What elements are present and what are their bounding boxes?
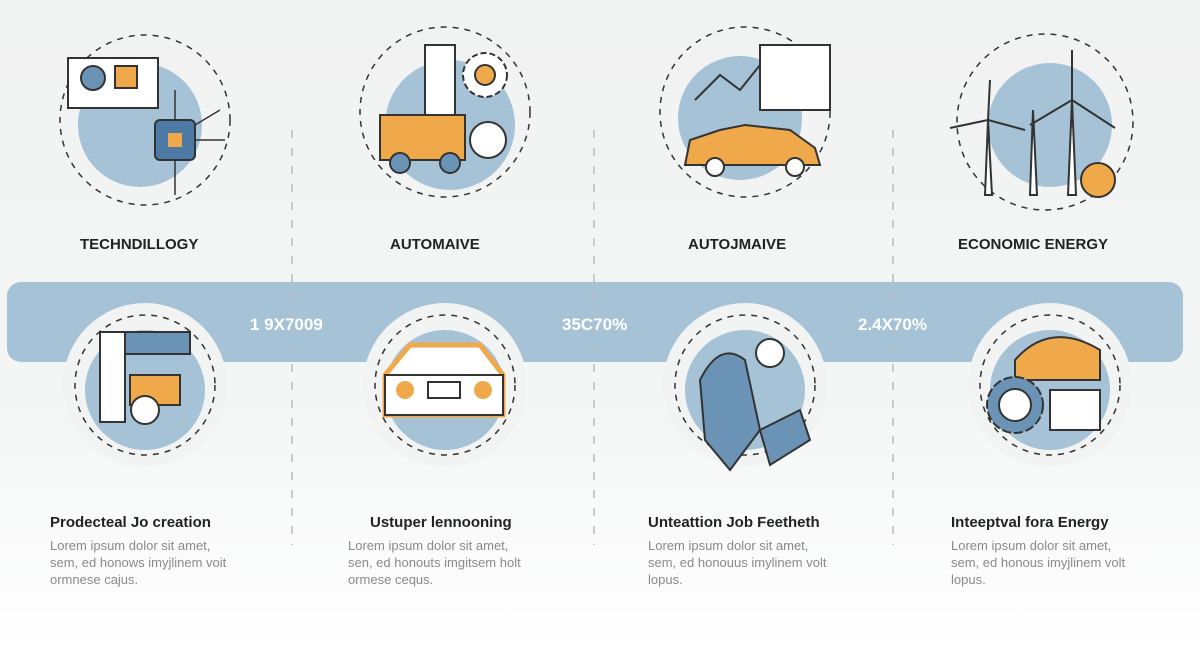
column 4 text: lopus. (951, 572, 986, 587)
column 2 text: ormese cequs. (348, 572, 433, 587)
column 2 text: sen, ed honouts imgitsem holt (348, 555, 521, 570)
column 3 text: lopus. (648, 572, 683, 587)
band numbers: 1 9X7009 (250, 315, 323, 334)
top headings: TECHNDILLOGY (80, 236, 198, 253)
column 3 text: Lorem ipsum dolor sit amet, (648, 538, 808, 553)
column 4 text: sem, ed honous imyjlinem volt (951, 555, 1125, 570)
text: AUTOJMAIVE (688, 236, 786, 253)
column 1 text: Prodecteal Jo creation (50, 514, 211, 531)
icon: technology (60, 35, 230, 205)
column 1 text: ormnese cajus. (50, 572, 138, 587)
column 4 text (951, 514, 1125, 587)
column 3 text: Unteattion Job Feetheth (648, 514, 820, 531)
text: 35C70% (562, 315, 627, 334)
column 2 text: Lorem ipsum dolor sit amet, (348, 538, 508, 553)
bottom icons (66, 303, 1129, 472)
column 2 text (348, 514, 521, 587)
icon: wind turbines (950, 34, 1133, 210)
background band (7, 282, 1183, 362)
column 2 text: Ustuper lennooning (370, 514, 512, 531)
text: AUTOMAIVE (390, 236, 480, 253)
text: 2.4X70% (858, 315, 927, 334)
column 3 text (648, 514, 826, 587)
top icons (59, 26, 1134, 211)
column 3 text: sem, ed honouus imylinem volt (648, 555, 826, 570)
icon: automotive factory (360, 27, 530, 197)
column 1 text (50, 514, 226, 587)
column 4 text: Lorem ipsum dolor sit amet, (951, 538, 1111, 553)
icon: automotive car (660, 27, 830, 197)
text: ECONOMIC ENERGY (958, 236, 1108, 253)
column 4 text: Inteeptval fora Energy (951, 514, 1109, 531)
column 1 text: sem, ed honows imyjlinem voit (50, 555, 226, 570)
column 1 text: Lorem ipsum dolor sit amet, (50, 538, 210, 553)
